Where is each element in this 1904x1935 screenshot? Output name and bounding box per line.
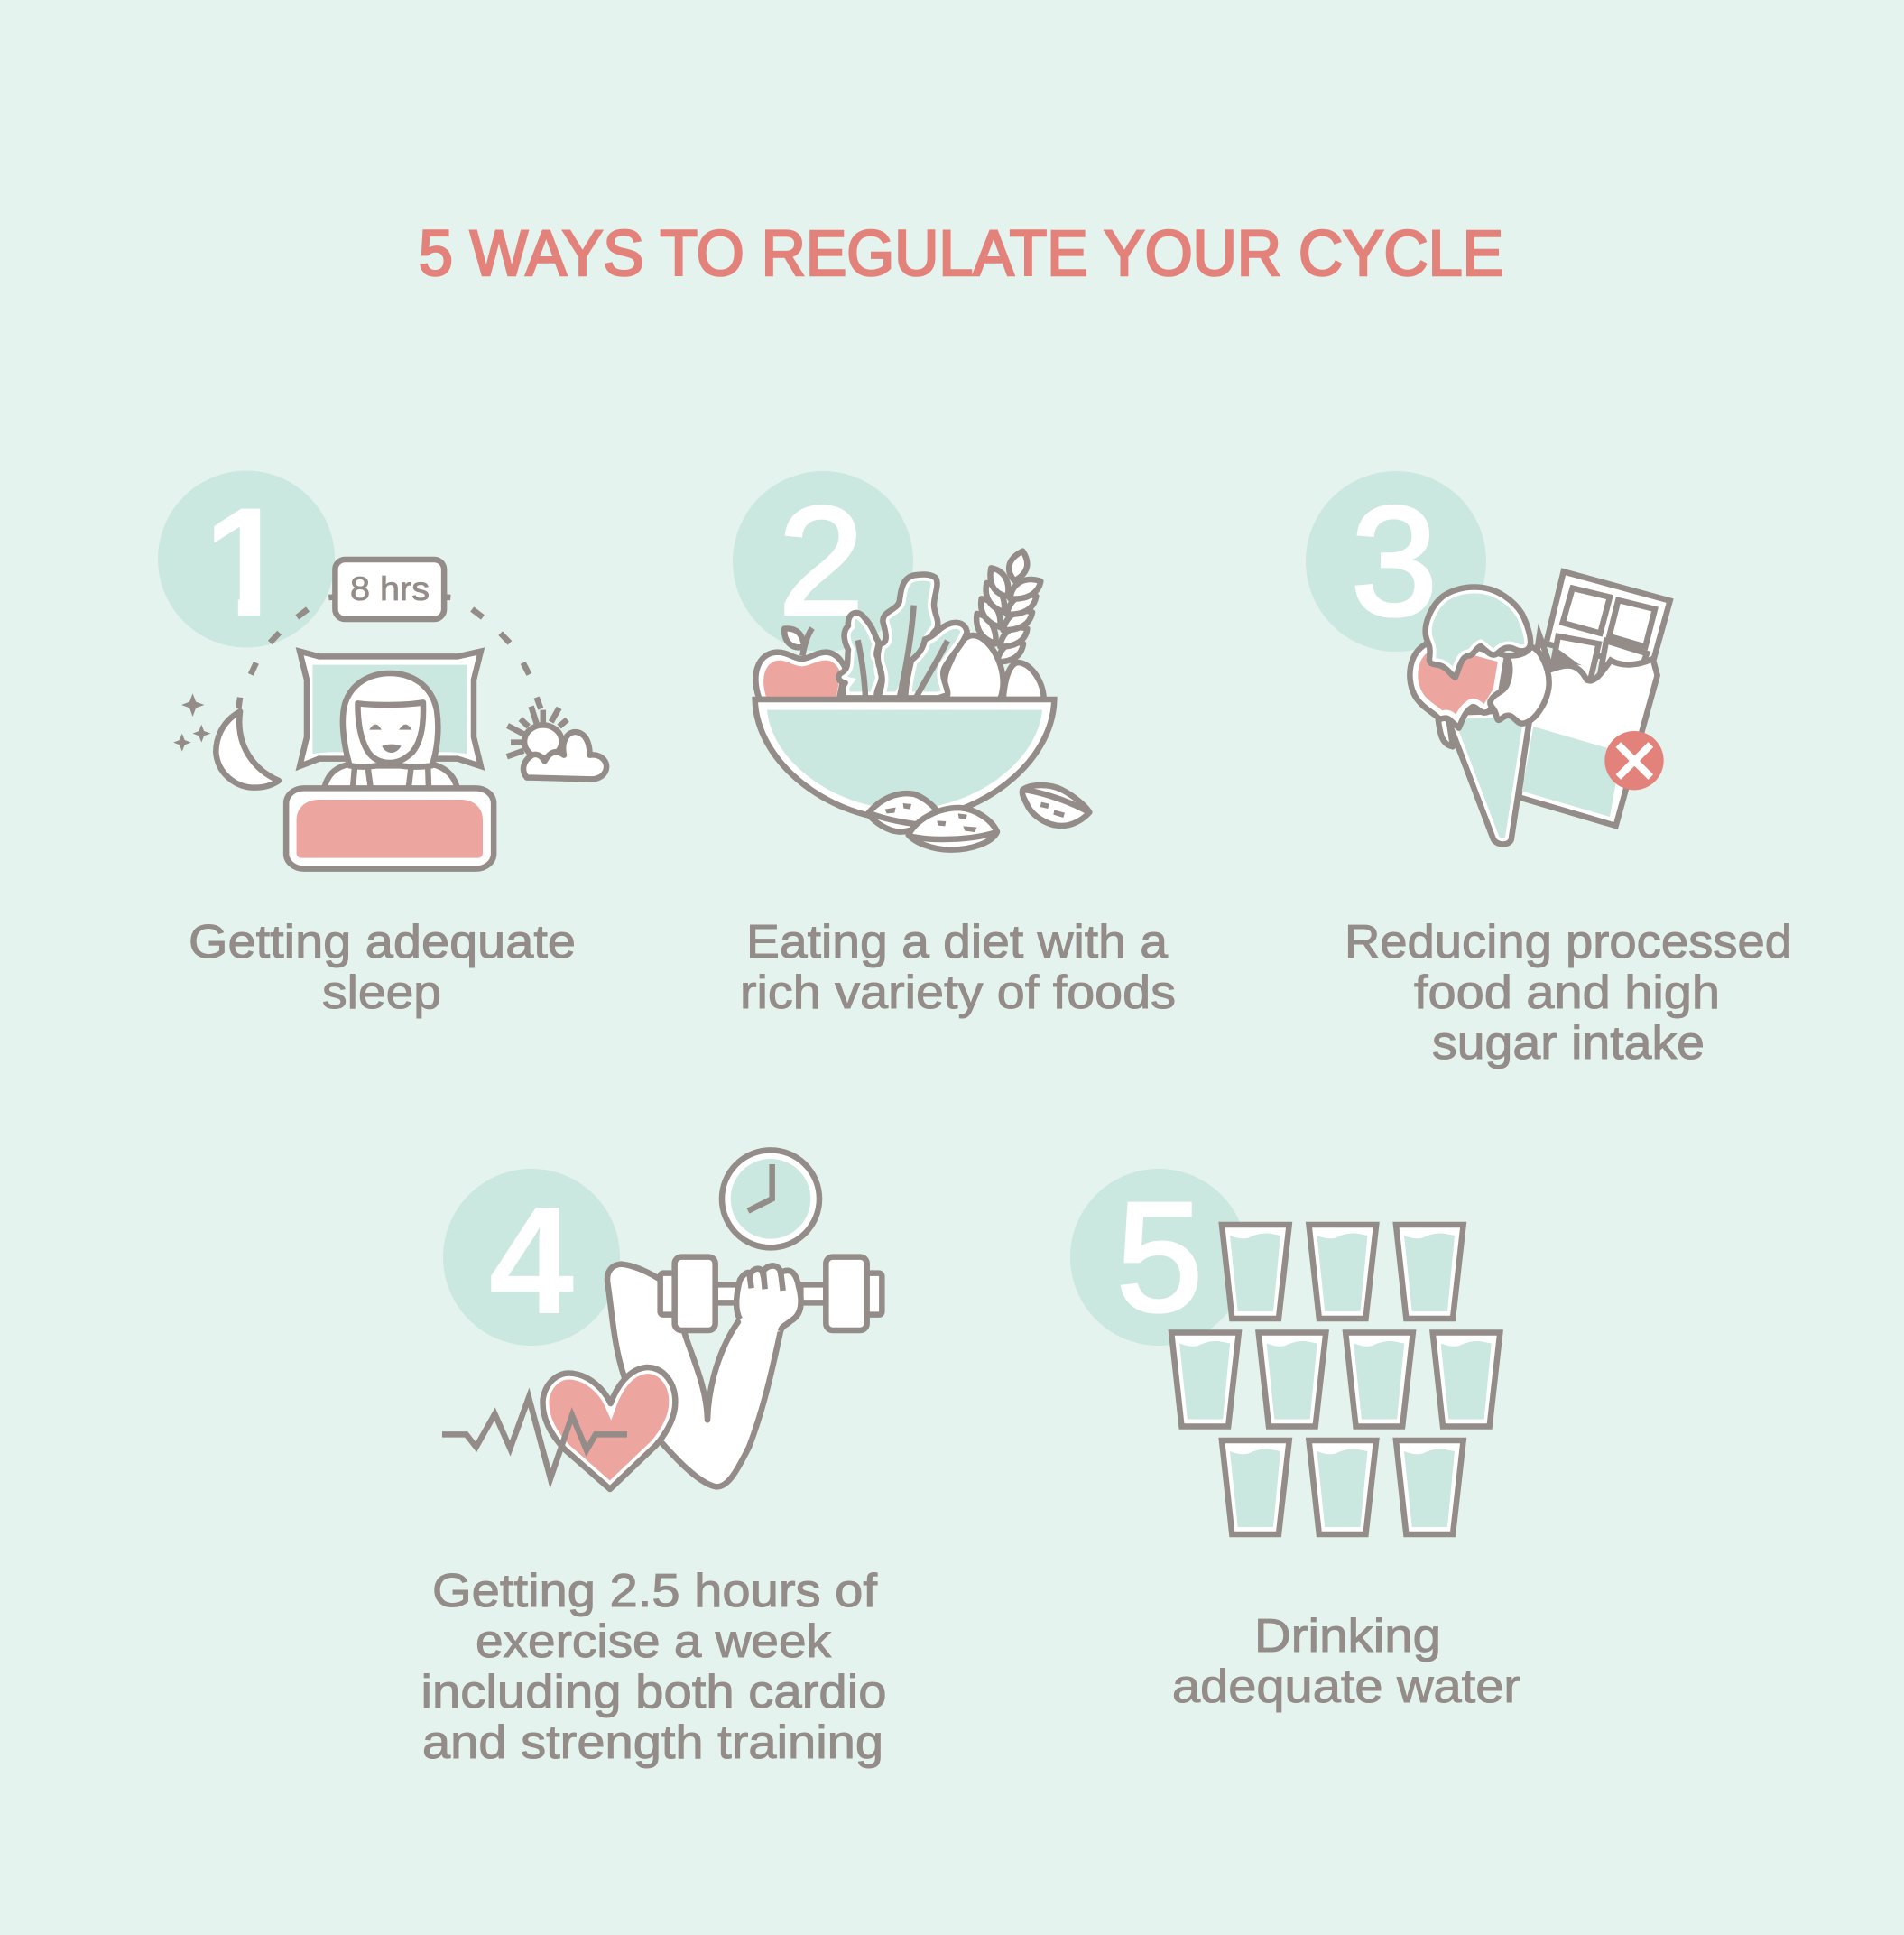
icon: arm, dumbbell, clock, heart bbox=[442, 1150, 882, 1489]
cloud bbox=[523, 732, 606, 779]
dumbbell bbox=[661, 1257, 882, 1330]
left drip bbox=[1437, 716, 1453, 746]
icon: ice cream and chocolate bbox=[1410, 571, 1670, 844]
label 2 bbox=[740, 916, 1176, 1019]
label 3: sugar intake bbox=[1432, 1017, 1705, 1069]
number badge 3: 3 bbox=[1351, 475, 1437, 648]
arm bbox=[607, 1264, 801, 1486]
hand bbox=[736, 1265, 801, 1336]
wrapper bbox=[1519, 635, 1658, 826]
number badge 1 bbox=[158, 471, 335, 649]
salmon scoop bbox=[1410, 638, 1507, 728]
chocolate squares bbox=[1546, 571, 1670, 683]
panel: step 4 exercise bbox=[421, 1150, 886, 1769]
label 5: adequate water bbox=[1172, 1661, 1520, 1713]
label 4: and strength training bbox=[422, 1717, 883, 1769]
number badge 5 bbox=[1070, 1169, 1247, 1346]
label 1: Getting adequate bbox=[189, 916, 576, 968]
label 1: sleep bbox=[322, 967, 441, 1019]
number badge 4 bbox=[443, 1169, 620, 1347]
icon: sleeping woman with moon and sun bbox=[173, 597, 606, 869]
stars bbox=[173, 693, 211, 752]
heart bbox=[542, 1367, 675, 1489]
hair strands bbox=[353, 769, 429, 788]
label 3: Reducing processed bbox=[1345, 916, 1792, 968]
number badge 2: 2 bbox=[779, 476, 864, 647]
badge: 8 hrs bbox=[335, 560, 444, 619]
panel: step 5 water bbox=[1070, 1169, 1520, 1713]
mint scoop bbox=[1426, 588, 1530, 678]
cone bbox=[1446, 710, 1531, 844]
label 3: food and high bbox=[1414, 967, 1720, 1019]
wheat bbox=[976, 551, 1040, 662]
white scoop bbox=[1490, 647, 1549, 724]
pulse line bbox=[442, 1397, 627, 1478]
label 4 bbox=[421, 1565, 886, 1769]
face bbox=[357, 702, 423, 763]
blanket bbox=[286, 788, 494, 869]
badge: 8 hrs: 8 hrs bbox=[350, 570, 430, 607]
dashed arc bbox=[238, 597, 541, 708]
number badge 4: 4 bbox=[489, 1175, 574, 1347]
number badge 5: 5 bbox=[1116, 1171, 1203, 1344]
label 4: including both cardio bbox=[421, 1666, 886, 1718]
panel: step 2 diet bbox=[733, 471, 1176, 1019]
label 4: exercise a week bbox=[476, 1616, 832, 1668]
shoulders bbox=[324, 764, 458, 790]
icon: ten glasses of water bbox=[1171, 1225, 1500, 1534]
pillow bbox=[300, 652, 481, 766]
title: 5 WAYS TO REGULATE YOUR CYCLE bbox=[419, 218, 1503, 290]
label 2: rich variety of foods bbox=[740, 967, 1176, 1019]
apple bbox=[755, 628, 846, 699]
eggs bbox=[945, 635, 1044, 699]
greens bbox=[838, 575, 967, 698]
number badge 3 bbox=[1306, 471, 1486, 652]
icon: salad bowl bbox=[755, 551, 1089, 850]
label 5: Drinking bbox=[1254, 1610, 1441, 1662]
label 3 bbox=[1345, 916, 1792, 1069]
hair bbox=[343, 673, 438, 767]
label 1 bbox=[189, 916, 576, 1019]
bowl bbox=[755, 699, 1054, 819]
moon bbox=[216, 711, 279, 788]
panel: step 1 sleep bbox=[158, 471, 606, 1019]
almonds bbox=[868, 785, 1089, 850]
panel: step 3 processed food bbox=[1306, 471, 1792, 1069]
icon: red x bbox=[1604, 731, 1664, 790]
label 4: Getting 2.5 hours of bbox=[432, 1565, 878, 1617]
number badge 2 bbox=[733, 471, 913, 652]
clock bbox=[722, 1150, 819, 1247]
label 2: Eating a diet with a bbox=[746, 916, 1168, 968]
number badge 1: 1 bbox=[204, 476, 290, 649]
sun bbox=[507, 707, 568, 758]
label 5 bbox=[1172, 1610, 1520, 1713]
